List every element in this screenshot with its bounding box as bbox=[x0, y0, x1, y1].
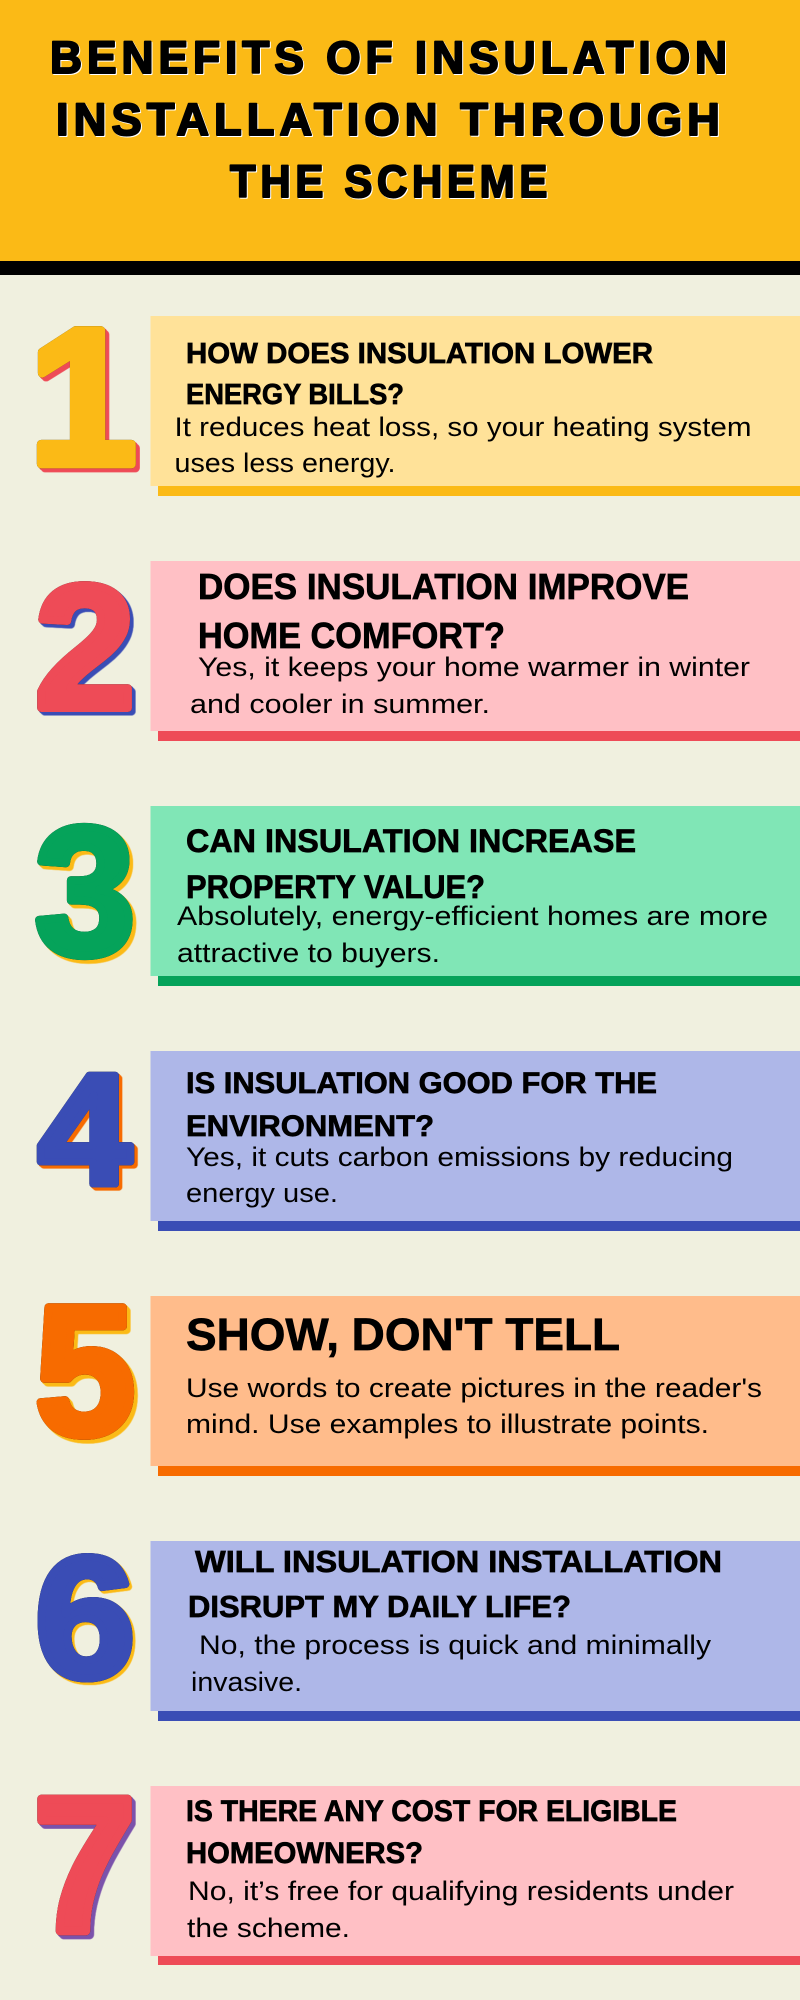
title bbox=[50, 32, 732, 207]
panel background bbox=[150, 1786, 800, 1956]
question heading bbox=[186, 823, 636, 905]
question heading: IS INSULATION GOOD FOR THE bbox=[186, 1067, 657, 1100]
question heading: HOMEOWNERS? bbox=[186, 1837, 423, 1870]
section 5 bbox=[35, 1267, 800, 1476]
answer text bbox=[191, 1630, 712, 1697]
answer text bbox=[190, 652, 750, 719]
number 4: 4 bbox=[38, 1041, 131, 1218]
answer text: It reduces heat loss, so your heating system bbox=[174, 412, 752, 442]
panel background bbox=[150, 1051, 800, 1221]
section 4 bbox=[38, 1041, 800, 1231]
number 2: 2 bbox=[35, 549, 135, 746]
question heading bbox=[198, 566, 689, 656]
number 5: 5 bbox=[35, 1267, 135, 1473]
answer text: uses less energy. bbox=[174, 448, 396, 478]
answer text: attractive to buyers. bbox=[177, 938, 440, 968]
panel background bbox=[150, 806, 800, 976]
number 6: 6 bbox=[35, 1523, 135, 1714]
answer text: No, the process is quick and minimally bbox=[199, 1630, 712, 1660]
panel background bbox=[150, 561, 800, 731]
answer text bbox=[186, 1373, 762, 1439]
question heading bbox=[188, 1544, 722, 1624]
panel background bbox=[150, 316, 800, 486]
question heading bbox=[186, 338, 653, 411]
section 6 bbox=[35, 1523, 800, 1721]
question heading bbox=[186, 1067, 657, 1143]
panel accent bar bbox=[158, 731, 800, 741]
title: THE SCHEME bbox=[230, 156, 552, 207]
title: BENEFITS OF INSULATION bbox=[50, 32, 732, 83]
panel background bbox=[150, 1541, 800, 1711]
title: INSTALLATION THROUGH bbox=[56, 94, 725, 145]
answer text: invasive. bbox=[191, 1667, 302, 1697]
answer text: the scheme. bbox=[187, 1913, 350, 1943]
question heading: PROPERTY VALUE? bbox=[186, 869, 485, 905]
question heading: ENVIRONMENT? bbox=[186, 1110, 434, 1143]
panel accent bar bbox=[158, 976, 800, 986]
answer text bbox=[174, 412, 752, 478]
answer text bbox=[177, 901, 768, 968]
question heading: HOME COMFORT? bbox=[198, 615, 505, 656]
panel accent bar bbox=[158, 1221, 800, 1231]
answer text: mind. Use examples to illustrate points. bbox=[186, 1409, 709, 1439]
answer text bbox=[186, 1142, 733, 1208]
answer text: No, it’s free for qualifying residents under bbox=[188, 1876, 734, 1906]
panel background bbox=[150, 1296, 800, 1466]
question heading: DISRUPT MY DAILY LIFE? bbox=[188, 1589, 571, 1624]
panel accent bar bbox=[158, 1711, 800, 1721]
section 2 bbox=[35, 549, 800, 746]
panel accent bar bbox=[158, 1466, 800, 1476]
answer text: Yes, it cuts carbon emissions by reducing bbox=[186, 1142, 733, 1172]
question heading: WILL INSULATION INSTALLATION bbox=[195, 1544, 722, 1579]
answer text bbox=[187, 1876, 734, 1943]
answer text: Use words to create pictures in the reader's bbox=[186, 1373, 762, 1403]
answer text: Absolutely, energy-efficient homes are more bbox=[177, 901, 768, 931]
panel accent bar bbox=[158, 486, 800, 496]
header banner bbox=[0, 0, 800, 275]
number 3: 3 bbox=[35, 790, 135, 993]
section 7 bbox=[34, 1757, 800, 1972]
answer text: energy use. bbox=[186, 1178, 338, 1208]
section 1 bbox=[29, 289, 800, 506]
number 7: 7 bbox=[34, 1757, 136, 1972]
question heading: CAN INSULATION INCREASE bbox=[186, 823, 636, 859]
question heading: HOW DOES INSULATION LOWER bbox=[186, 338, 653, 370]
question heading: DOES INSULATION IMPROVE bbox=[198, 566, 689, 607]
answer text: Yes, it keeps your home warmer in winter bbox=[198, 652, 750, 682]
question heading: SHOW, DON'T TELL bbox=[186, 1309, 620, 1360]
section 3 bbox=[35, 790, 800, 993]
question heading: IS THERE ANY COST FOR ELIGIBLE bbox=[186, 1795, 677, 1828]
answer text: and cooler in summer. bbox=[190, 689, 490, 719]
question heading bbox=[186, 1795, 677, 1870]
question heading: ENERGY BILLS? bbox=[186, 379, 404, 411]
number 1: 1 bbox=[29, 289, 137, 506]
panel accent bar bbox=[158, 1956, 800, 1965]
